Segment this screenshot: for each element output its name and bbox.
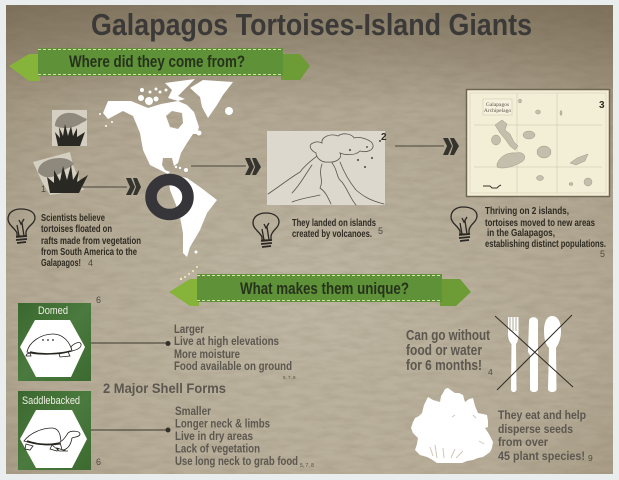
text: landed on islands (292, 217, 383, 240)
icon: tortoise in grass, large (33, 152, 88, 195)
text: domed traits: 5, 7, 8 (283, 375, 296, 380)
text: can go without food: food or water (406, 343, 482, 359)
connector: domed (91, 341, 170, 346)
panel: domed shell (18, 303, 91, 381)
icon: crossed-out cutlery (495, 315, 573, 392)
arrow: America to volcano (191, 158, 261, 175)
text: saddlebacked traits: Live in dry areas (175, 431, 253, 443)
text: seeds: disperse seeds (498, 422, 573, 436)
text: saddlebacked traits: Longer neck & limbs (175, 418, 270, 430)
text: can go without food: 4 (488, 367, 493, 377)
text: scientists believe: 4 (88, 258, 93, 268)
text: scientists believe: from South America to the (41, 246, 137, 258)
text: thriving on 2 islands: 5 (600, 249, 605, 259)
text: domed traits: More moisture (174, 349, 240, 361)
text: domed traits (174, 324, 296, 380)
icon: tortoise in grass, small (52, 110, 87, 146)
text: domed traits: Live at high elevations (174, 336, 279, 348)
icon: saddleback tortoise (24, 428, 80, 451)
title: Galapagos Tortoises-Island Giants (91, 7, 532, 42)
text: saddlebacked traits: 5, 7, 8 (300, 463, 314, 469)
text: can go without food: for 6 months! (406, 358, 482, 374)
dotted raft path (180, 266, 198, 280)
icon: domed tortoise (26, 334, 81, 357)
text: scientists believe: Scientists believe (41, 212, 105, 224)
text: thriving on 2 islands (485, 205, 606, 259)
icon: light bulb 1 (8, 209, 35, 243)
map: the Americas (99, 79, 233, 257)
panel: saddlebacked shell: Saddlebacked (22, 395, 80, 407)
ring: Galapagos marker (151, 180, 188, 214)
text: landed on islands: created by volcanoes. (292, 228, 372, 240)
text: domed traits: Larger (174, 324, 204, 336)
text: seeds (498, 408, 593, 463)
text: scientists believe: Galapagos! (41, 257, 81, 269)
heading: 2 major shell forms: 2 Major Shell Forms (103, 380, 226, 396)
citation: 6 domed: 6 (96, 295, 101, 305)
text: seeds: 9 (588, 453, 593, 463)
text: can go without food (406, 328, 493, 377)
text: saddlebacked traits: Lack of vegetation (175, 444, 260, 456)
arrow: raft to South America (81, 178, 141, 195)
icon: tortoise in grass, large: 1 (41, 184, 46, 194)
arrow: volcano to archipelago (395, 138, 459, 155)
text: scientists believe (41, 212, 141, 269)
banner: where did they come from: Where did they come from? (69, 53, 245, 71)
banner: what makes them unique: What makes them unique? (240, 280, 409, 298)
citation: 6 saddlebacked: 6 (96, 457, 101, 467)
image: volcano sketch (267, 131, 387, 205)
image: volcano sketch: 2 (381, 132, 387, 143)
map: Galapagos Archipelago: Archipelago (484, 108, 511, 114)
text: scientists believe: rafts made from vegetation (41, 235, 141, 247)
panel: saddlebacked shell (18, 391, 91, 470)
text: saddlebacked traits: Smaller (175, 406, 211, 418)
text: thriving on 2 islands: Thriving on 2 islands, (485, 205, 569, 217)
icon: white bush (411, 388, 493, 463)
map: Galapagos Archipelago: Galapagos (486, 102, 509, 108)
text: saddlebacked traits (175, 406, 314, 469)
text: landed on islands: 5 (378, 226, 383, 236)
map: Galapagos Archipelago: 3 (599, 100, 605, 111)
text: seeds: They eat and help (498, 408, 586, 422)
text: thriving on 2 islands: in the Galapagos, (487, 227, 555, 239)
text: saddlebacked traits: Use long neck to grab food (175, 456, 298, 468)
panel: domed shell: Domed (38, 305, 68, 317)
text: landed on islands: They landed on islands (292, 217, 376, 229)
text: domed traits: Food available on ground (174, 361, 292, 373)
icon: light bulb 3 (451, 207, 477, 241)
map: Galapagos Archipelago (466, 90, 610, 196)
banner: what makes them unique (169, 274, 471, 306)
text: scientists believe: tortoises floated on (41, 223, 112, 235)
connector: saddlebacked (91, 428, 170, 432)
text: can go without food: Can go without (406, 328, 490, 344)
icon: light bulb 2 (253, 213, 279, 247)
text: seeds: 45 plant species! (498, 449, 585, 463)
banner: where did they come from (9, 48, 310, 81)
text: seeds: from over (498, 435, 548, 449)
